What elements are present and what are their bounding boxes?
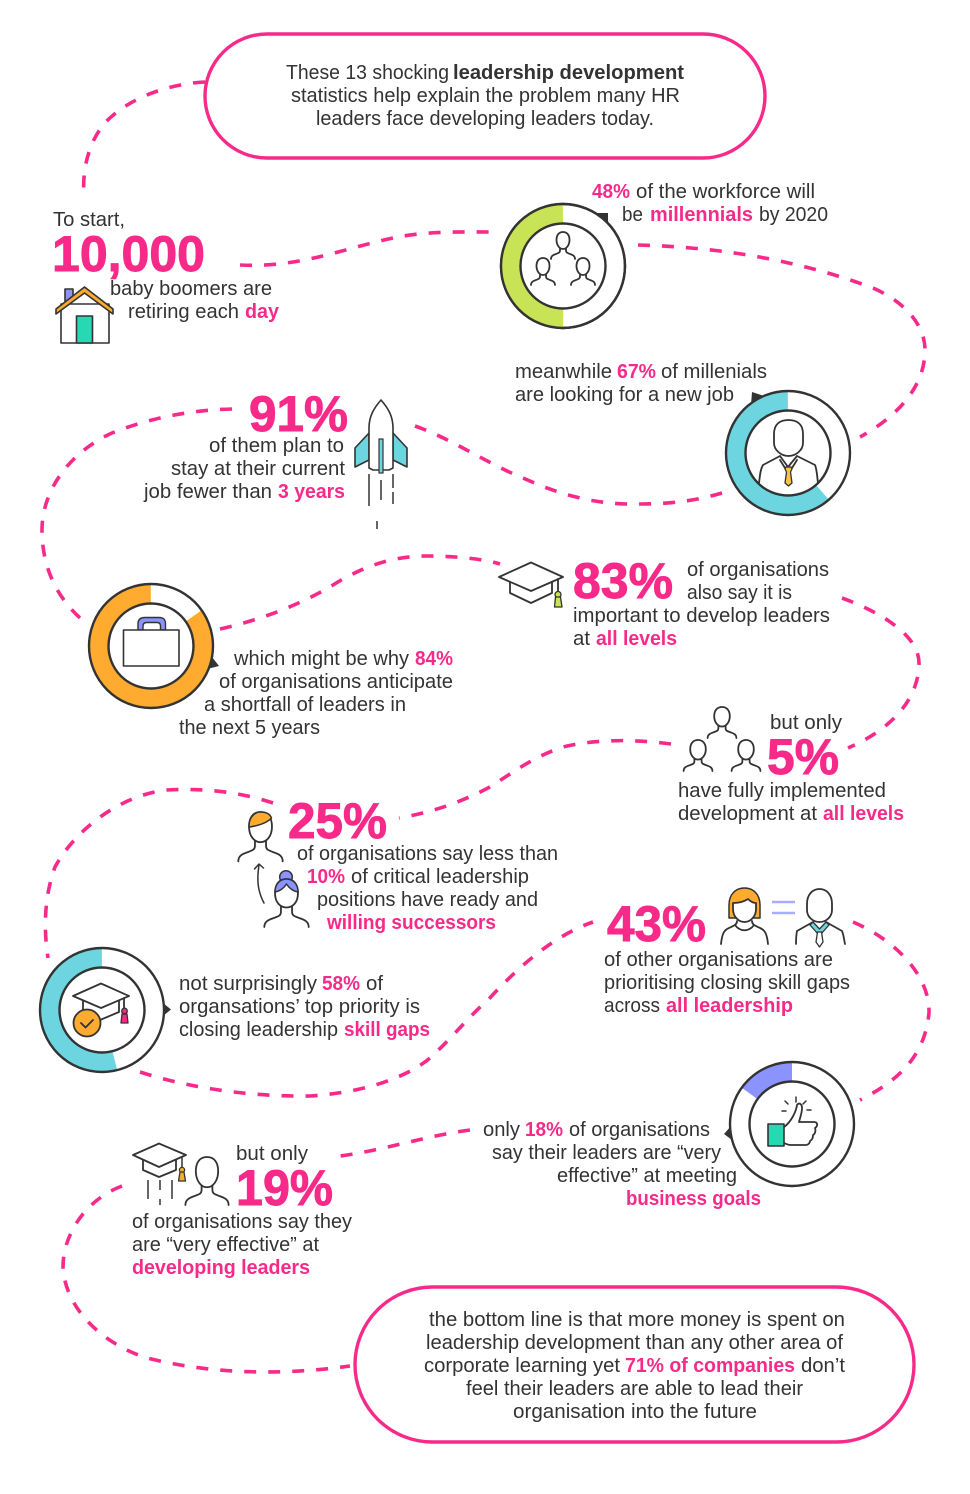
stat: 25% willing successors: [288, 793, 558, 934]
stat: 43% closing skill gaps: across: [604, 994, 660, 1017]
stat: 10,000 baby boomers: 10,000: [52, 226, 205, 282]
panel: bottom line pill: leadership development than any other area of: [426, 1331, 843, 1354]
stat: 25% willing successors: of organisations say less than: [297, 842, 558, 865]
icon: rocket: [355, 400, 407, 529]
panel: bottom line pill: don’t: [801, 1354, 845, 1377]
stat: 83% develop leaders at all levels: at: [573, 627, 590, 650]
stat: 18% business goals: effective” at meeting: [557, 1164, 737, 1187]
stat: 5% implemented at all levels: have fully implemented: [678, 779, 886, 802]
panel: intro pill: leaders face developing leaders today.: [316, 107, 654, 130]
panel: intro pill: These 13 shocking: [286, 61, 449, 84]
stat: 10,000 baby boomers: [52, 208, 280, 323]
stat: 67% of millenials: 67%: [617, 360, 656, 383]
stat: 25% willing successors: positions have ready and: [317, 888, 538, 911]
icon: ring chart with three people: [501, 204, 625, 328]
stat: 10,000 baby boomers: To start,: [53, 208, 125, 231]
stat: 83% develop leaders at all levels: 83%: [573, 553, 673, 609]
stat: 67% of millenials: are looking for a new job: [515, 383, 734, 406]
stat: 84% anticipate shortfall: which might be why: [233, 647, 410, 670]
panel: bottom line pill: [355, 1287, 914, 1442]
stat: 91% plan to stay fewer than 3 years: job fewer than: [143, 480, 272, 503]
stat: 84% anticipate shortfall: a shortfall of leaders in: [204, 693, 406, 716]
stat: 25% willing successors: 25%: [288, 793, 387, 849]
stat: 91% plan to stay fewer than 3 years: of them plan to: [209, 434, 344, 457]
stat: 25% willing successors: 10%: [307, 865, 345, 888]
stat: 91% plan to stay fewer than 3 years: 91%: [249, 386, 348, 442]
icon: three people: [684, 707, 760, 771]
stat: 10,000 baby boomers: day: [245, 300, 280, 323]
icon: ring chart with thumbs up: [719, 1051, 865, 1197]
stat: 67% of millenials: meanwhile: [515, 360, 612, 383]
panel: bottom line pill: the bottom line is that more money is spent on: [429, 1308, 845, 1331]
stat: 5% implemented at all levels: 5%: [767, 729, 839, 785]
stat: 18% business goals: [483, 1118, 761, 1210]
stat: 5% implemented at all levels: but only: [770, 711, 843, 734]
stat: 48% millennials: [592, 180, 828, 226]
stat: 84% anticipate shortfall: [179, 647, 453, 739]
panel: bottom line pill: feel their leaders are able to lead their: [466, 1377, 803, 1400]
stat: 48% millennials: be: [622, 203, 643, 226]
dashed connector path: [42, 82, 929, 1372]
stat: 43% closing skill gaps: 43%: [607, 896, 706, 952]
stat: 58% skill gaps: closing leadership: [179, 1018, 338, 1041]
panel: bottom line pill: organisation into the future: [513, 1400, 757, 1423]
stat: 67% of millenials: of millenials: [661, 360, 767, 383]
stat: 48% millennials: of the workforce will: [636, 180, 815, 203]
stat: 58% skill gaps: skill gaps: [344, 1018, 430, 1041]
stat: 48% millennials: millennials: [650, 203, 753, 226]
stat: 18% business goals: of organisations: [569, 1118, 710, 1141]
stat: 58% skill gaps: 58%: [322, 972, 360, 995]
stat: 5% implemented at all levels: development at: [678, 802, 817, 825]
stat: 19% developing leaders: 19%: [236, 1160, 333, 1216]
stat: 43% closing skill gaps: prioritising closing skill gaps: [604, 971, 850, 994]
stat: 83% develop leaders at all levels: also say it is: [687, 581, 792, 604]
stat: 48% millennials: by 2020: [759, 203, 828, 226]
icon: graduation cap and person: [133, 1144, 229, 1205]
stat: 58% skill gaps: organsations’ top priority is: [179, 995, 420, 1018]
icon: ring chart with businessman: [715, 380, 861, 526]
stat: 5% implemented at all levels: all levels: [823, 802, 904, 825]
icon: woman equals man: [721, 888, 845, 947]
stat: 25% willing successors: willing successors: [326, 911, 496, 934]
stat: 58% skill gaps: not surprisingly: [179, 972, 318, 995]
stat: 84% anticipate shortfall: of organisations anticipate: [219, 670, 453, 693]
stat: 18% business goals: only: [483, 1118, 521, 1141]
icon: succession people with arrow: [238, 812, 309, 927]
stat: 18% business goals: say their leaders are “very: [492, 1141, 722, 1164]
icon: ring chart with briefcase: [79, 574, 223, 718]
stat: 19% developing leaders: are “very effective” at: [132, 1233, 319, 1256]
stat: 91% plan to stay fewer than 3 years: [143, 386, 348, 503]
icon: ring chart with graduation cap and check: [39, 947, 171, 1073]
stat: 43% closing skill gaps: all leadership: [666, 994, 793, 1017]
stat: 5% implemented at all levels: [678, 711, 904, 825]
stat: 91% plan to stay fewer than 3 years: 3 years: [278, 480, 345, 503]
panel: intro pill: leadership development: [453, 61, 684, 84]
panel: intro pill: [205, 34, 765, 158]
icon: house: [56, 287, 113, 343]
stat: 19% developing leaders: developing leaders: [132, 1256, 310, 1279]
stat: 91% plan to stay fewer than 3 years: stay at their current: [171, 457, 345, 480]
stat: 43% closing skill gaps: of other organisations are: [604, 948, 833, 971]
stat: 19% developing leaders: [132, 1142, 353, 1279]
stat: 19% developing leaders: but only: [236, 1142, 309, 1165]
panel: intro pill: statistics help explain the problem many HR: [291, 84, 680, 107]
stat: 83% develop leaders at all levels: all levels: [596, 627, 677, 650]
stat: 84% anticipate shortfall: 84%: [415, 647, 453, 670]
stat: 83% develop leaders at all levels: of organisations: [687, 558, 829, 581]
stat: 25% willing successors: of critical leadership: [351, 865, 529, 888]
stat: 58% skill gaps: of: [366, 972, 383, 995]
stat: 43% closing skill gaps: [604, 896, 850, 1017]
panel: bottom line pill: corporate learning yet: [424, 1354, 620, 1377]
stat: 84% anticipate shortfall: the next 5 years: [179, 716, 320, 739]
stat: 58% skill gaps: [179, 972, 430, 1041]
panel: bottom line pill: 71% of companies: [625, 1354, 795, 1377]
stat: 18% business goals: business goals: [626, 1187, 761, 1210]
stat: 83% develop leaders at all levels: important to develop leaders: [573, 604, 830, 627]
stat: 83% develop leaders at all levels: [573, 553, 830, 650]
stat: 10,000 baby boomers: baby boomers are: [110, 277, 272, 300]
stat: 10,000 baby boomers: retiring each: [128, 300, 239, 323]
stat: 19% developing leaders: of organisations say they: [132, 1210, 353, 1233]
stat: 48% millennials: 48%: [592, 180, 630, 203]
stat: 18% business goals: 18%: [525, 1118, 563, 1141]
icon: graduation cap: [499, 562, 563, 607]
stat: 67% of millenials: [515, 360, 767, 406]
